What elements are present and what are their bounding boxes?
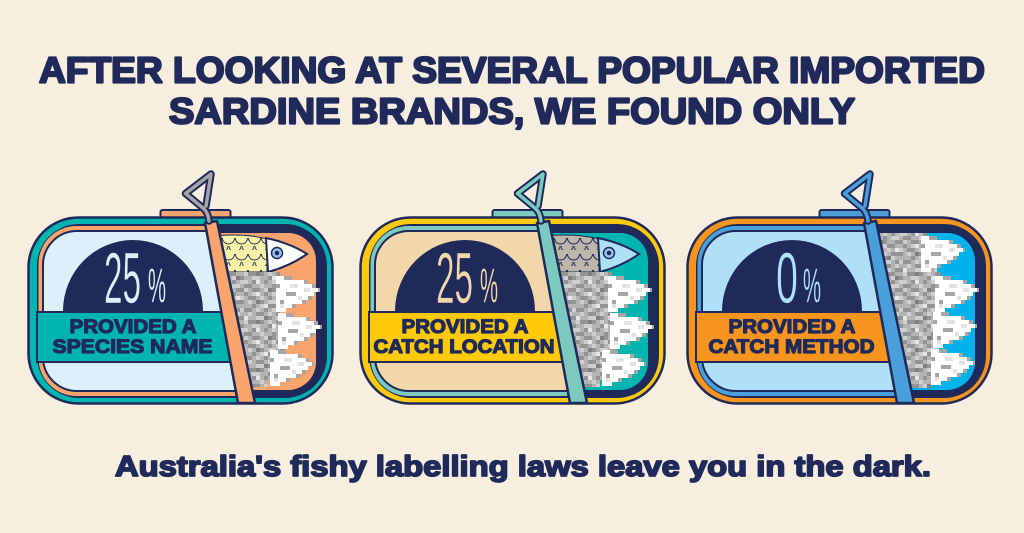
- title: SARDINE BRANDS, WE FOUND ONLY: [169, 90, 855, 132]
- dome with percentage: [395, 239, 535, 319]
- ring pull: [518, 174, 543, 221]
- dome with percentage: 25: [104, 239, 141, 319]
- fish with scales and head: [544, 235, 639, 272]
- key strip: [205, 221, 255, 403]
- can body: [688, 218, 992, 404]
- dome with percentage: %: [480, 260, 498, 313]
- can body: [28, 218, 332, 404]
- dome with percentage: %: [148, 260, 166, 313]
- banner: [369, 312, 563, 362]
- banner: SPECIES NAME: [52, 336, 212, 358]
- footer tagline: Australia's fishy labelling laws leave you in the dark.: [115, 451, 931, 483]
- title: [39, 50, 985, 132]
- pixelated fish: [561, 272, 654, 387]
- pixelated fish: [880, 233, 979, 388]
- panel: sardine can catch method: [688, 174, 992, 404]
- key strip: [537, 221, 587, 403]
- banner: PROVIDED A: [402, 316, 528, 338]
- title: AFTER LOOKING AT SEVERAL POPULAR IMPORTED: [39, 50, 985, 90]
- banner: CATCH METHOD: [708, 336, 874, 358]
- panel: sardine can species name: [28, 174, 332, 404]
- banner: CATCH LOCATION: [374, 336, 555, 358]
- dome with percentage: 25: [436, 239, 473, 319]
- can tab: [492, 210, 562, 218]
- dome with percentage: 0: [776, 239, 798, 319]
- dome with percentage: [722, 239, 862, 319]
- dome with percentage: [63, 239, 203, 319]
- panel: sardine can catch location: [360, 174, 664, 404]
- can tab: [820, 210, 890, 218]
- banner: PROVIDED A: [728, 316, 856, 338]
- banner: [696, 312, 890, 362]
- can tab: [160, 210, 230, 218]
- banner: PROVIDED A: [70, 316, 196, 338]
- pixelated fish: [229, 272, 322, 387]
- dome with percentage: %: [803, 260, 821, 313]
- can body: [360, 218, 664, 404]
- ring pull: [186, 174, 211, 221]
- banner: [37, 312, 231, 362]
- ring pull: [844, 174, 870, 221]
- key strip: [864, 221, 914, 403]
- fish with scales and head: [212, 235, 307, 272]
